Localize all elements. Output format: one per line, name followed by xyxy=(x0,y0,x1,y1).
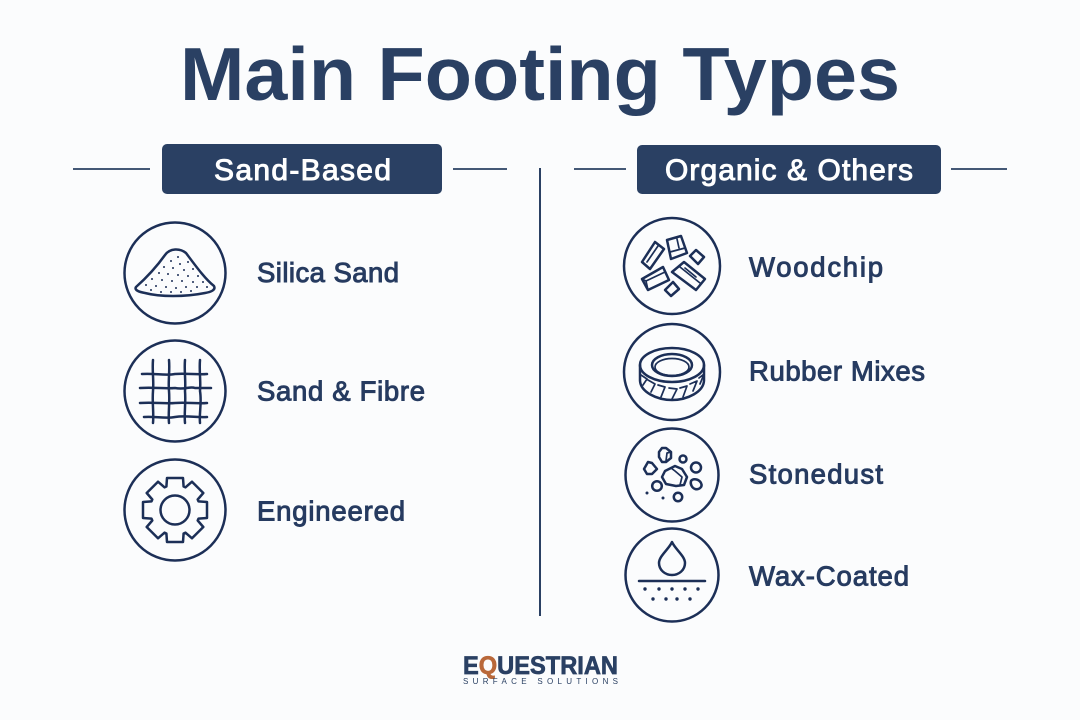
heading: Organic & Others xyxy=(637,145,941,194)
icon: fibre grid xyxy=(124,340,226,442)
label: Wax-Coated: Wax-Coated xyxy=(749,560,909,592)
icon: wax drop xyxy=(626,528,718,622)
title: Main Footing Types xyxy=(180,32,900,116)
icon: stonedust xyxy=(626,428,718,522)
icon: sand pile xyxy=(124,222,226,324)
label: Sand & Fibre: Sand & Fibre xyxy=(257,376,425,406)
panel: organic and others xyxy=(574,145,1007,622)
label: Rubber Mixes: Rubber Mixes xyxy=(749,356,925,386)
label: Woodchip: Woodchip xyxy=(749,252,883,282)
label: Engineered: Engineered xyxy=(257,496,405,526)
icon: woodchips xyxy=(624,218,720,314)
logo: SURFACE SOLUTIONS xyxy=(463,677,618,686)
label: Silica Sand: Silica Sand xyxy=(257,257,399,288)
heading: Sand-Based xyxy=(162,144,442,194)
panel: sand-based xyxy=(73,144,507,560)
logo: EQUESTRIAN xyxy=(463,652,618,680)
heading: Organic & Others: Organic & Others xyxy=(665,154,913,187)
heading: Sand-Based: Sand-Based xyxy=(214,154,391,187)
label: Stonedust: Stonedust xyxy=(749,458,883,490)
icon: rubber tyre xyxy=(624,324,720,420)
icon: gear xyxy=(124,460,226,560)
